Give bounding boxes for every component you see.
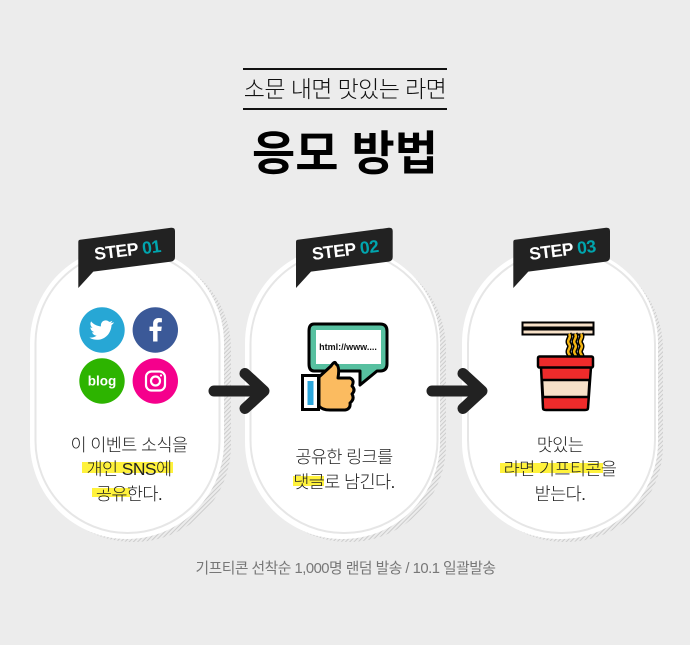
icon: ramen cup <box>522 322 594 410</box>
text: step 2 description: 공유한 링크를 <box>295 447 393 467</box>
text: step 1 description: 공유한다. <box>96 484 162 504</box>
arrow: step 1 to 2 <box>214 374 264 408</box>
panel: step 2 <box>245 228 446 542</box>
pill card <box>30 246 224 539</box>
hatched shadow <box>468 252 663 542</box>
icon: facebook <box>133 307 178 353</box>
step tag <box>296 228 393 288</box>
hatched shadow <box>251 252 446 542</box>
text: step 2 description <box>293 447 395 492</box>
step tag: STEP 03 <box>528 236 598 264</box>
text: step 1 description: 이 이벤트 소식을 <box>70 435 188 455</box>
icon: thumbs up with url bubble: html://www.... <box>319 342 377 352</box>
icon: thumbs up with url bubble <box>302 324 387 410</box>
text: step 1 description: 개인 SNS에 <box>87 459 171 479</box>
text: step 3 description: 받는다. <box>535 484 585 504</box>
pill card <box>245 246 440 539</box>
step tag: STEP 02 <box>311 236 380 264</box>
subtitle: 소문 내면 맛있는 라면 <box>244 76 446 102</box>
text: step 3 description: 라면 기프티콘을 <box>504 459 617 479</box>
subtitle top rule <box>243 68 447 70</box>
icon: twitter <box>79 307 125 353</box>
text: step 3 description <box>500 435 617 504</box>
main heading: 응모 방법 <box>252 127 438 180</box>
icon: blog <box>79 358 125 404</box>
step tag <box>513 228 610 288</box>
text: step 2 description: 댓글로 남긴다. <box>293 472 395 492</box>
hatched shadow <box>36 252 231 542</box>
panel: step 1 <box>30 228 231 542</box>
step tag <box>78 228 175 288</box>
title block <box>243 68 447 180</box>
panel: step 3 <box>462 228 663 542</box>
step tag: STEP 01 <box>93 236 163 264</box>
icon: instagram <box>133 358 178 404</box>
footnote: 기프티콘 선착순 1,000명 랜덤 발송 / 10.1 일괄발송 <box>195 560 496 577</box>
arrow: step 2 to 3 <box>432 374 482 408</box>
pill card <box>462 246 658 539</box>
icon: blog: blog <box>88 374 116 388</box>
subtitle bottom rule <box>243 108 447 110</box>
text: step 1 description <box>70 435 188 504</box>
text: step 3 description: 맛있는 <box>537 435 584 455</box>
